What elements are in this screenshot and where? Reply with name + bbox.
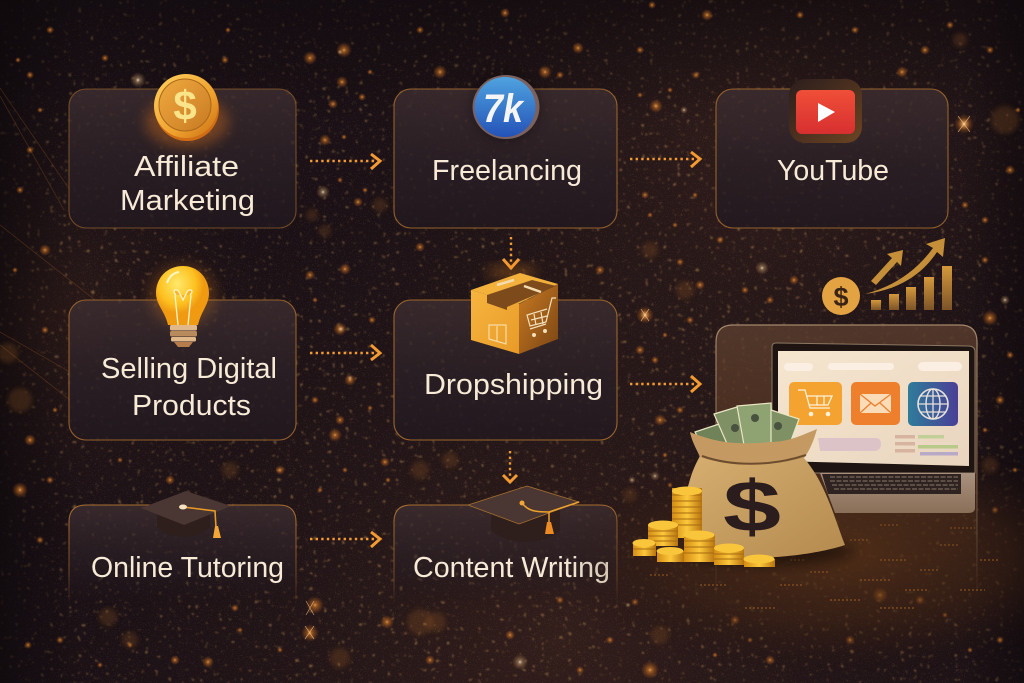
- icon: gold dollar coin: [145, 74, 229, 148]
- laptop: [772, 343, 975, 513]
- arrow: tutoring to content writing: [310, 532, 380, 547]
- label: content writing: Content Writing: [413, 552, 610, 584]
- arrow: long growth curve: [865, 238, 945, 294]
- icon: graduation cap: [468, 486, 579, 542]
- panel: youtube: [716, 79, 948, 228]
- label: affiliate marketing: Marketing: [120, 185, 255, 217]
- growth chart with dollar coin: [822, 238, 952, 315]
- screen top bars: [784, 362, 962, 371]
- label: dropshipping: Dropshipping: [424, 369, 603, 401]
- arrow: affiliate to freelancing: [310, 154, 380, 169]
- arrow: digital products to dropshipping: [310, 345, 380, 360]
- panel: freelancing: [394, 73, 617, 228]
- icon: graduation cap: [141, 491, 231, 538]
- label: selling digital products: Products: [132, 390, 251, 422]
- icon: blue 7k badge: [472, 73, 540, 141]
- label: selling digital products: [101, 353, 277, 422]
- icon: youtube play: [789, 79, 862, 143]
- label: youtube: YouTube: [777, 155, 889, 187]
- arrow: dropshipping to laptop: [630, 376, 700, 392]
- icon: email tile: [851, 382, 900, 425]
- icon: gold dollar coin: $: [173, 82, 197, 129]
- icon: blue 7k badge: 7k: [483, 87, 525, 131]
- arrow: freelancing to dropshipping: [503, 237, 519, 268]
- panel: selling digital products: [69, 263, 296, 440]
- arrow: short growth: [871, 250, 903, 285]
- cash bills: [695, 403, 799, 447]
- label: affiliate marketing: [120, 151, 255, 217]
- gold coin stacks: [632, 486, 775, 567]
- arrow: dropshipping to content writing: [503, 451, 517, 482]
- icon: light bulb: [149, 263, 217, 347]
- label: online tutoring: Online Tutoring: [91, 552, 284, 584]
- panel: laptop and money bag: [632, 325, 977, 600]
- screen lower content bars: [818, 435, 958, 456]
- icon: cardboard box with cart: [471, 265, 558, 354]
- money bag: [685, 403, 855, 566]
- label: affiliate marketing: Affiliate: [134, 151, 239, 183]
- dollar sign on sack: $: [723, 467, 781, 547]
- icon: small dollar coin: $: [833, 282, 849, 312]
- panel: content writing: [394, 486, 617, 605]
- panel: dropshipping: [394, 265, 617, 440]
- bar chart: [871, 266, 952, 310]
- label: selling digital products: Selling Digital: [101, 353, 277, 385]
- icon: globe tile: [908, 382, 958, 426]
- panel: affiliate marketing: [69, 74, 296, 228]
- icon: shopping cart tile: [789, 382, 842, 425]
- arrow: freelancing to youtube: [630, 152, 700, 167]
- label: freelancing: Freelancing: [432, 155, 582, 187]
- panel: online tutoring: [69, 491, 296, 605]
- table surface with glitter: [540, 430, 1024, 683]
